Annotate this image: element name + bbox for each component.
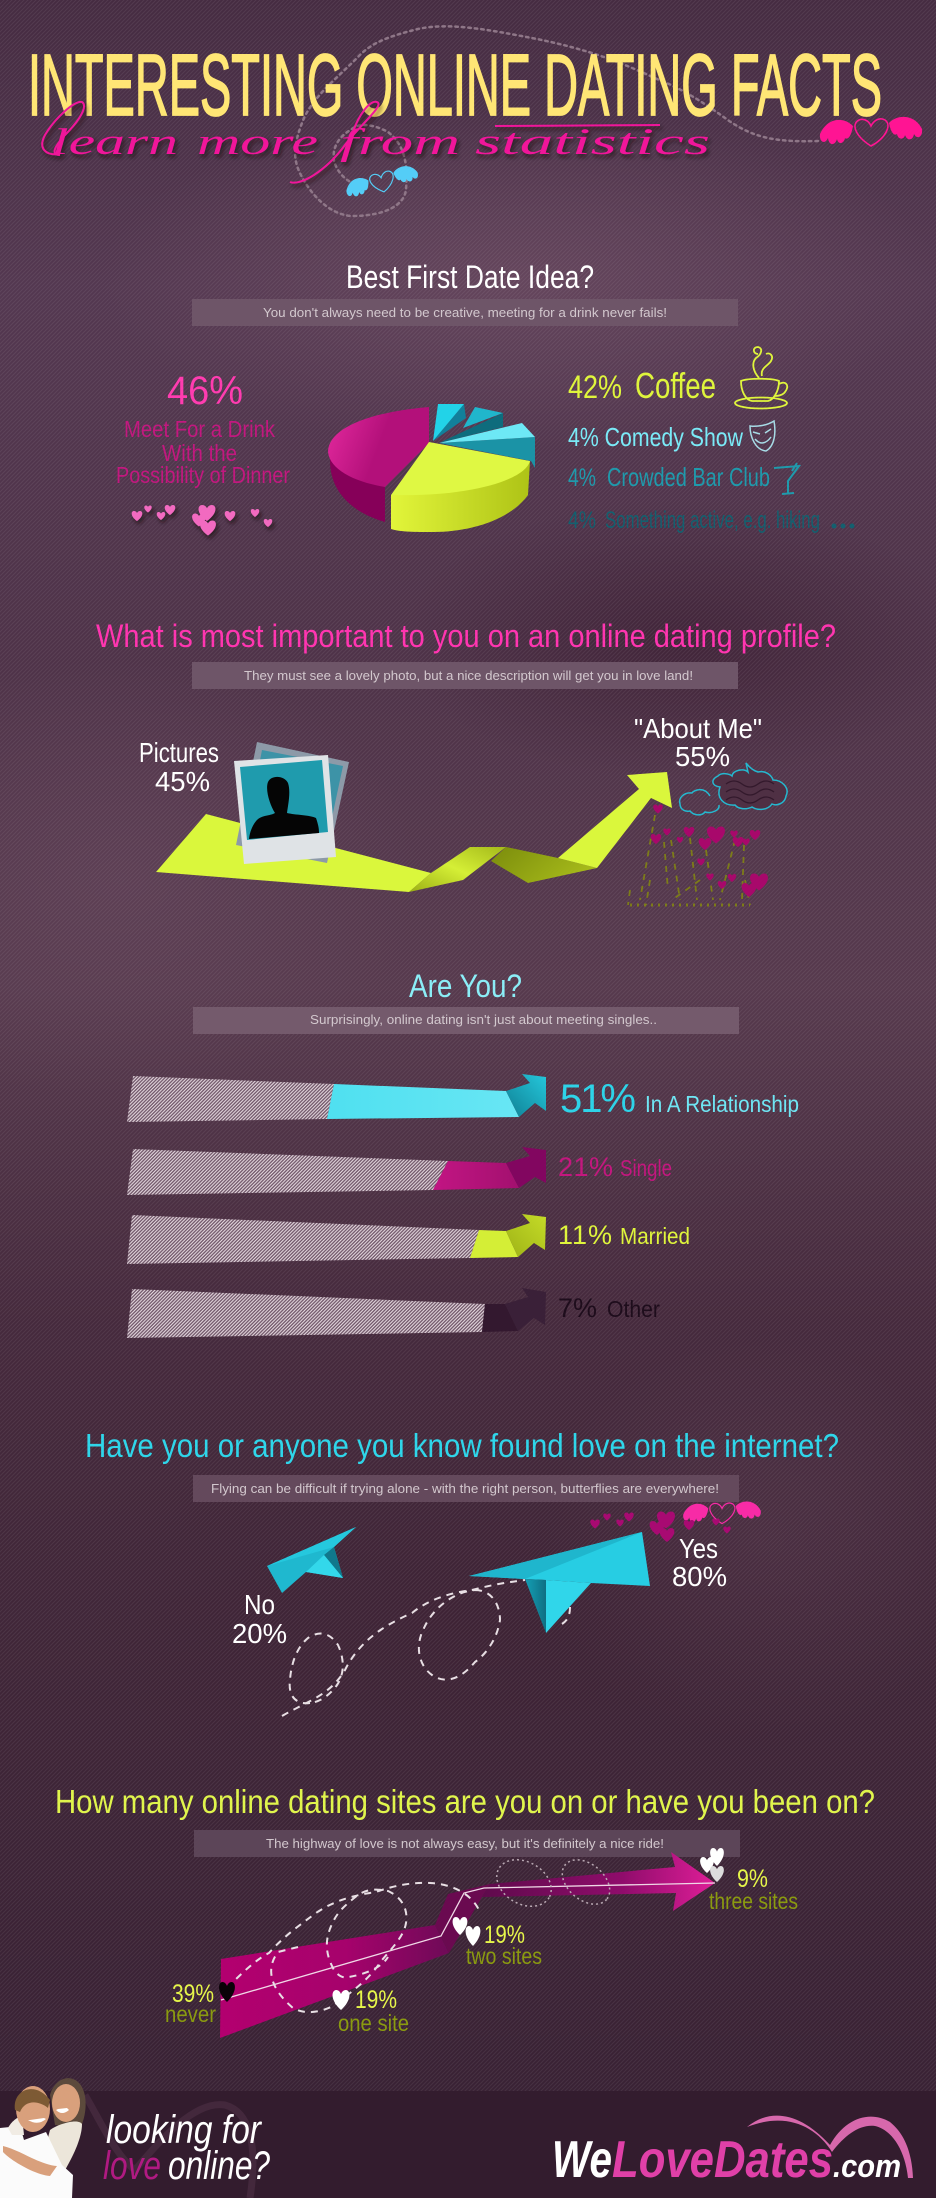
legend: something active: Something active, e.g. hiking (605, 507, 820, 534)
bar: in a relationship 51 percent: 51% (560, 1077, 636, 1121)
label: yes (672, 1533, 727, 1592)
logo: welovedates.com: .com (833, 2148, 901, 2184)
subtitle: from (340, 122, 460, 163)
label: pictures (139, 737, 219, 797)
callout: 46 percent: With the (162, 440, 237, 466)
subtitle: statistics (475, 122, 710, 163)
label: yes: 80% (672, 1561, 727, 1592)
couple photo (0, 2078, 86, 2198)
subtitle band: best first date: You don't always need to be creative, meeting for a drink never fails! (263, 305, 667, 320)
label: no (232, 1589, 287, 1649)
bar: other 7 percent (127, 1288, 660, 1338)
label: two sites: two sites (466, 1943, 542, 1969)
callout: 46 percent (116, 369, 290, 488)
label: pictures: 45% (155, 766, 210, 797)
label: yes: Yes (679, 1533, 718, 1564)
heading: found love: Have you or anyone you know found love on the internet? (85, 1427, 839, 1464)
icon: small paper plane (267, 1527, 356, 1593)
logo: welovedates.com (552, 2116, 913, 2189)
subtitle: learn (52, 122, 178, 163)
icon: winged heart and hearts (590, 1501, 761, 1542)
label: about me: 55% (675, 741, 730, 772)
dashed flight trail (282, 1580, 570, 1716)
icon: thought clouds (680, 763, 787, 815)
subtitle band: are you (193, 1007, 739, 1034)
label: two sites (466, 1921, 542, 1969)
label: one site: 19% (355, 1986, 397, 2014)
legend: comedy show: 4% Comedy Show (568, 422, 743, 452)
subtitle band: found love: Flying can be difficult if trying alone - with the right person, butterflies are everywhere! (211, 1481, 719, 1496)
label: never: 39% (172, 1980, 214, 2008)
logo: welovedates.com: We (552, 2131, 612, 2189)
subtitle band: found love (193, 1475, 739, 1502)
bar: in a relationship 51 percent: In A Relationship (645, 1091, 799, 1117)
subtitle band: best first date (192, 299, 738, 326)
arrow: highway of love (220, 1852, 715, 2038)
icon: small hearts (132, 505, 272, 536)
heading: best first date: Best First Date Idea? (346, 259, 594, 295)
pie slice: magenta 46 percent (328, 407, 429, 522)
label: one site: one site (338, 2010, 409, 2036)
hearts on highway (219, 1848, 724, 2010)
legend: coffee (568, 365, 716, 406)
legend: crowded bar club: Crowded Bar Club (607, 462, 770, 492)
dotted flight path (295, 26, 818, 216)
legend: coffee: Coffee (635, 365, 716, 406)
legend: coffee: 42% (568, 369, 622, 405)
subtitle band: how many sites: The highway of love is not always easy, but it's definitely a nice ride! (266, 1836, 664, 1851)
callout: 46 percent: 46% (167, 369, 243, 413)
label: no: No (244, 1589, 275, 1620)
label: about me (634, 713, 762, 772)
arrow: folded yellow ribbon (156, 772, 672, 892)
label: three sites (709, 1865, 798, 1914)
icon: comedy mask (750, 421, 775, 451)
logo: welovedates.com: LoveDates (612, 2131, 833, 2189)
subtitle band: online profile (192, 662, 738, 689)
call to action: looking for (106, 2108, 262, 2152)
call to action: online? (168, 2144, 271, 2188)
legend: crowded bar club: 4% (568, 464, 596, 492)
label: pictures: Pictures (139, 737, 219, 768)
legend: something active: 4% (568, 507, 596, 534)
pie slices: cyan 4 percent (433, 404, 535, 468)
call to action (103, 2108, 271, 2188)
call to action: love (103, 2144, 161, 2188)
subtitle (42, 102, 710, 183)
subtitle: more (197, 122, 318, 163)
icon: winged heart pink (820, 117, 922, 146)
bar: married 11 percent: Married (620, 1223, 690, 1249)
legend: crowded bar club (568, 462, 770, 492)
label: about me: "About Me" (634, 713, 762, 744)
heading: are you: Are You? (409, 968, 522, 1004)
pie chart (328, 404, 535, 532)
label: one site (338, 1986, 409, 2036)
label: no: 20% (232, 1618, 287, 1649)
bar: single 21 percent: 21% (558, 1152, 613, 1182)
label: three sites: 9% (737, 1865, 768, 1893)
label: never: never (165, 2001, 216, 2027)
bar: married 11 percent (127, 1214, 690, 1264)
subtitle band: online profile: They must see a lovely photo, but a nice description will get you in love land! (244, 668, 693, 683)
icon: heart flowers (628, 804, 768, 905)
footer band (0, 2091, 936, 2198)
bar: other 7 percent: 7% (558, 1293, 597, 1323)
label: three sites: three sites (709, 1888, 798, 1914)
dotted road loops (488, 1850, 618, 1916)
bar: single 21 percent (127, 1147, 672, 1195)
bar: single 21 percent: Single (620, 1155, 672, 1181)
icon: polaroid photos (234, 742, 349, 864)
bar: married 11 percent: 11% (558, 1220, 612, 1250)
pie slice: yellow 42 percent (391, 442, 530, 532)
callout: 46 percent: Meet For a Drink (124, 416, 275, 442)
icon: coffee cup (735, 347, 787, 408)
subtitle band: how many sites (194, 1830, 740, 1857)
callout: 46 percent: Possibility of Dinner (116, 462, 290, 488)
heading: online profile: What is most important to you on an online dating profile? (96, 618, 836, 654)
label: two sites: 19% (484, 1921, 525, 1949)
bar: in a relationship 51 percent (127, 1074, 799, 1122)
icon: martini glass (774, 463, 799, 494)
label: never (165, 1980, 216, 2027)
icon: winged heart blue (344, 164, 420, 200)
dashed road loops (227, 1883, 479, 2012)
subtitle band: are you: Surprisingly, online dating isn't just about meeting singles.. (310, 1012, 657, 1027)
bar: other 7 percent: Other (607, 1296, 660, 1322)
icon: large paper plane (469, 1532, 650, 1633)
